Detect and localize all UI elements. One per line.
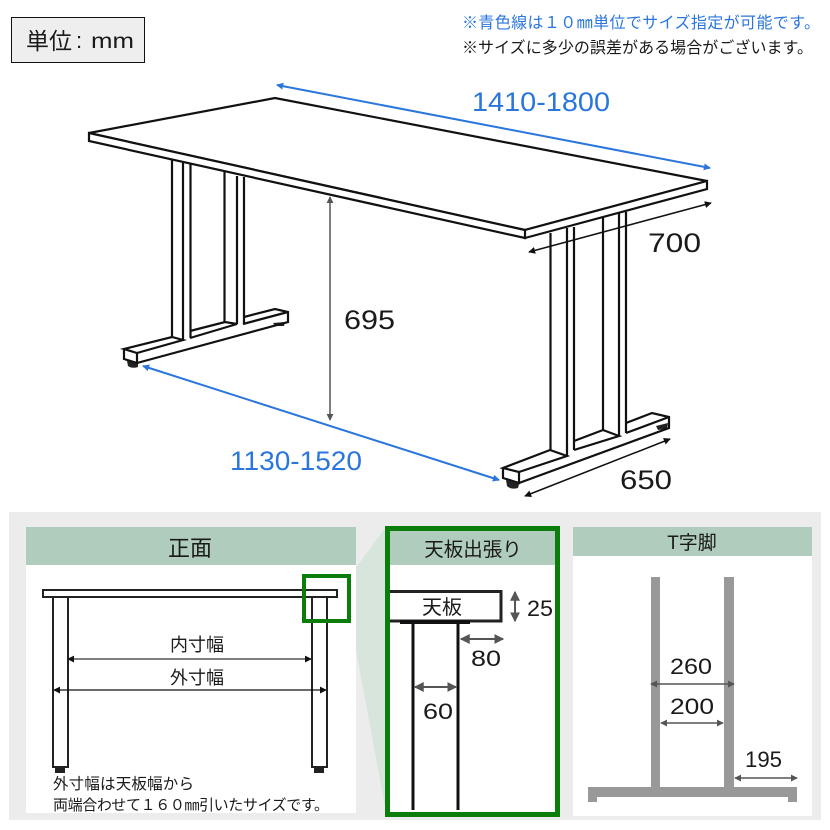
notes [462,14,820,57]
panel: T leg [573,527,812,816]
header: front: 正面 [168,536,212,561]
green frame [388,528,558,814]
table top front [43,590,337,597]
caption [53,775,329,814]
header: overhang: 天板出張り [424,539,522,561]
dimension: top length [277,85,710,168]
leg section [413,624,458,810]
unit label: mm [91,30,134,53]
dimension 195: 195 [745,747,782,772]
header: front [26,527,356,565]
table top section: 天板 [422,596,462,619]
dimension 80 [461,639,503,671]
header: T leg: T字脚 [667,532,717,554]
dimension 200 [661,694,723,723]
dimension 200: 200 [670,694,714,719]
dimension: top length: 1410-1800 [472,87,610,117]
panel: front view [26,527,356,814]
header: overhang [388,530,557,565]
caption: 両端合わせて１６０㎜引いたサイズです。 [53,797,329,814]
dimension 195 [735,747,797,778]
notes: ※サイズに多少の誤差がある場合がございます。 [462,38,813,57]
table illustration [89,98,707,489]
dimension 60: 60 [423,699,453,724]
table top section [389,592,501,624]
right T-leg [503,212,669,489]
unit label [12,18,144,62]
unit label: : [76,28,82,53]
dimension: height: 695 [344,305,395,335]
dimension 260 [651,654,734,684]
inner width: 内寸幅 [170,635,224,655]
dimension: foot length: 650 [620,465,672,495]
dimension 60 [415,687,456,724]
dimension 80: 80 [471,646,501,671]
header: T leg [573,527,812,556]
dimension: foot length [525,439,672,496]
dimension 25 [515,592,553,621]
caption: 外寸幅は天板幅から [53,775,194,793]
dimension: depth [529,203,711,258]
highlight square [304,576,349,621]
T leg shape [588,577,797,802]
dimension: depth: 700 [648,228,701,258]
left T-leg [124,160,288,368]
dimension 25: 25 [527,596,553,621]
bottom background [9,512,821,820]
notes: ※青色線は１０㎜単位でサイズ指定が可能です。 [462,14,820,32]
legs [53,597,327,773]
dimension: leg spacing [143,366,499,480]
table top [89,98,707,238]
zoom connector [351,527,386,812]
dimension 260: 260 [670,654,712,679]
panel: overhang detail [388,528,558,814]
dimension: leg spacing: 1130-1520 [230,446,362,476]
unit label: 単位 [26,28,72,54]
outer width: 外寸幅 [170,668,224,688]
